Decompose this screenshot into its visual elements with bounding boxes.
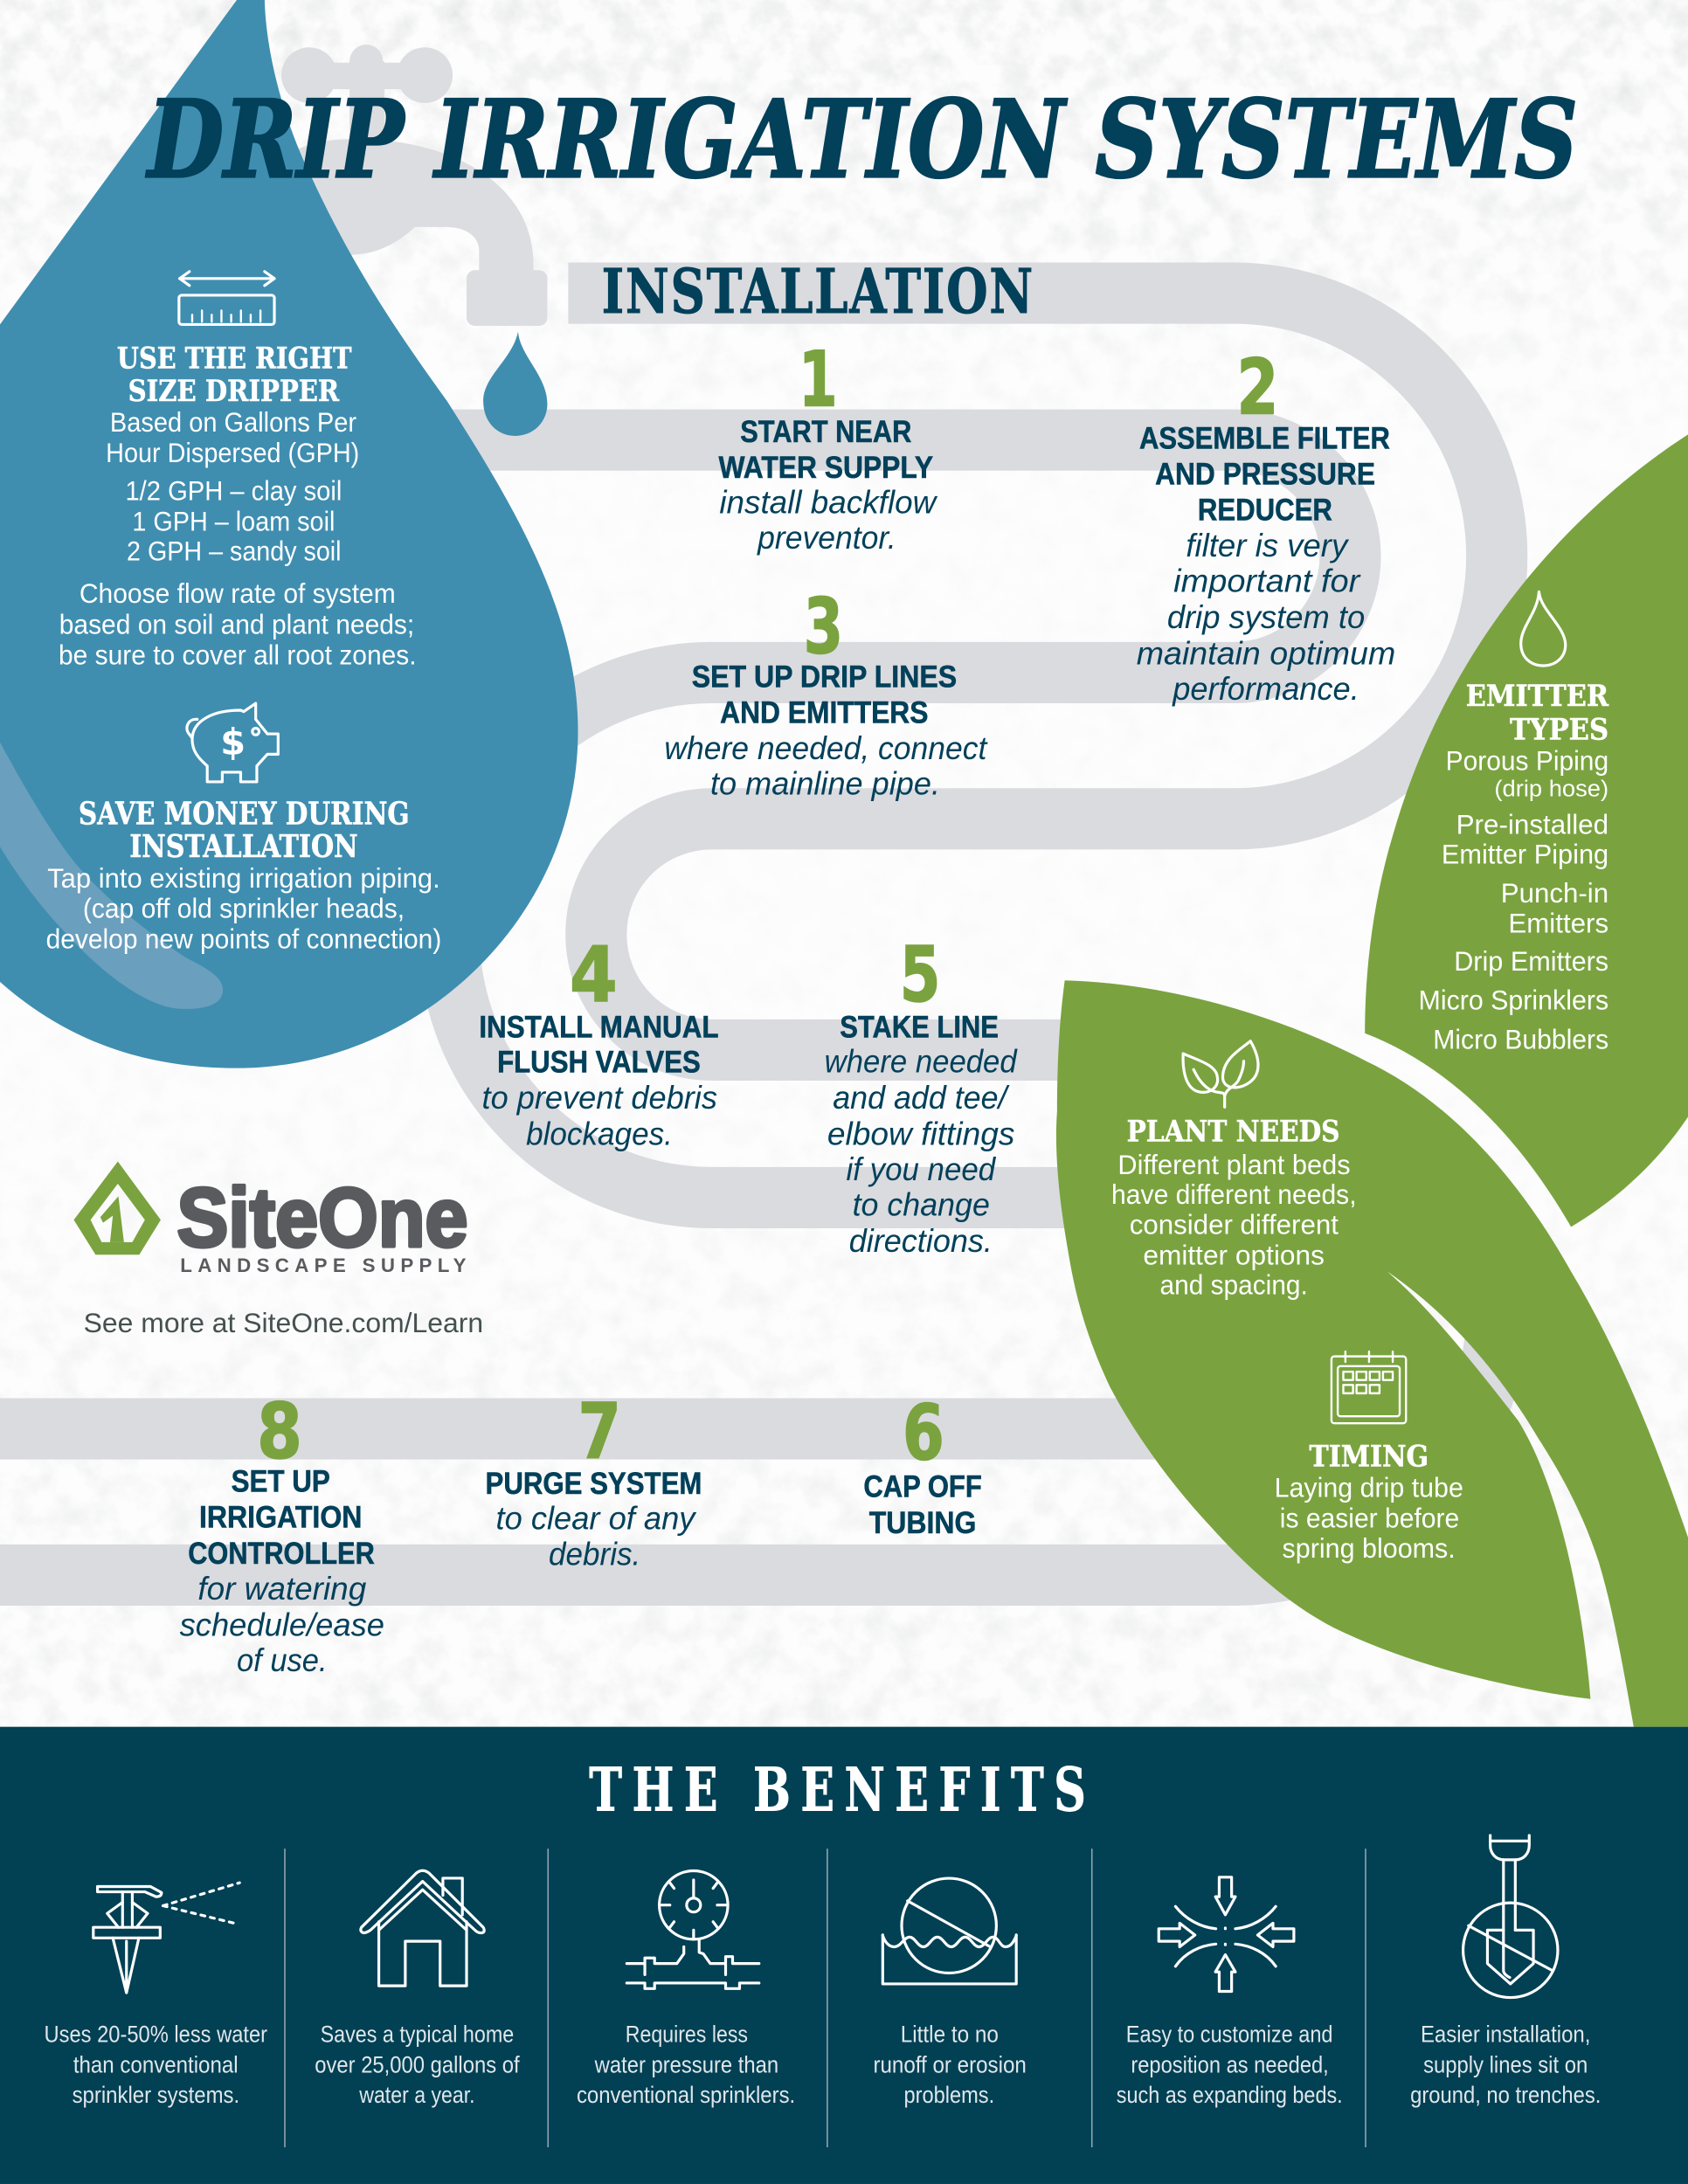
benefit text: water a year. [358,2081,475,2108]
step 8: for watering [197,1571,367,1607]
timing body text: spring blooms. [1282,1533,1456,1564]
step 5: where needed [825,1043,1018,1079]
step 3: SET UP DRIP LINES [692,660,957,694]
step 2: performance. [1172,671,1359,707]
icon: ruler with arrow [179,272,274,324]
step 1 [719,335,938,556]
benefit text: Requires less [626,2021,748,2048]
benefit 5: easy to customize [1117,1877,1343,2108]
benefit 2: saves gallons [315,1870,520,2108]
step 1: START NEAR [740,415,911,449]
panel: plant needs [1111,1041,1357,1301]
logo wordmark: SiteOne [176,1171,468,1265]
plant needs body text [1111,1150,1357,1301]
step 1: WATER SUPPLY [719,451,933,485]
step 4: 4 [570,930,618,1019]
benefit text: runoff or erosion [873,2051,1027,2078]
step 5: directions. [849,1223,993,1259]
step 8 [180,1387,384,1678]
step 8: schedule/ease [180,1607,384,1642]
savings body text: Tap into existing irrigation piping. [47,863,440,894]
step 7: debris. [549,1537,640,1572]
icon: calendar [1332,1351,1406,1423]
emitter list: Porous Piping [1446,746,1608,777]
emitter list: Drip Emitters [1454,946,1608,977]
step 2: drip system to [1167,599,1365,635]
dripper body text: 1 GPH – loam soil [132,506,335,536]
panel: the benefits [0,1727,1688,2184]
step 2: REDUCER [1198,494,1332,528]
timing body text: Laying drip tube [1275,1473,1463,1503]
dripper body text: 2 GPH – sandy soil [127,536,342,567]
step 5: STAKE LINE [840,1011,999,1045]
savings heading [79,796,410,865]
plant needs body text: Different plant beds [1117,1150,1351,1180]
dripper body text: Based on Gallons Per [110,407,356,438]
savings heading: SAVE MONEY DURING [79,796,410,832]
step 3: where needed, connect [664,730,988,766]
step 5 [825,930,1018,1259]
step 5: elbow fittings [827,1116,1014,1151]
panel: emitter types [1419,591,1609,1054]
benefits heading: THE BENEFITS [589,1755,1086,1825]
step 2: ASSEMBLE FILTER [1139,421,1390,455]
step 2: important for [1173,563,1361,598]
panel: timing [1275,1351,1463,1564]
step 6: CAP OFF [863,1470,982,1504]
icon: no runoff basin [882,1878,1016,1984]
drop highlight [0,743,223,1009]
plant needs body text: and spacing. [1160,1270,1308,1301]
icon: piggy bank [187,703,278,782]
benefit text [45,2021,267,2108]
plant needs body text: consider different [1130,1209,1339,1240]
benefit text: Easy to customize and [1126,2021,1333,2048]
step 3 [664,583,988,802]
benefit text: water pressure than [594,2051,778,2078]
savings body text: (cap off old sprinkler heads, [83,894,405,924]
heading: installation: INSTALLATION [602,255,1033,328]
icon: grey faucet [272,45,547,326]
serpentine pipe: inner line [0,440,1350,1429]
benefit text: Easier installation, [1421,2021,1590,2048]
dripper body text: Hour Dispersed (GPH) [106,438,359,468]
emitter list: Emitters [1508,908,1608,938]
dripper body text: based on soil and plant needs; [59,609,414,639]
benefit text [577,2021,795,2108]
step 6: 6 [903,1389,944,1478]
emitter list [1419,746,1608,1054]
step 1: install backflow [719,484,938,520]
step 5: 5 [900,930,940,1019]
benefit text: Little to no [901,2021,999,2048]
benefit text: supply lines sit on [1423,2051,1588,2078]
step 4: to prevent debris [482,1080,717,1116]
step 5: and add tee/ [833,1080,1010,1116]
step 1: 1 [799,335,838,425]
emitter heading: EMITTER [1466,679,1609,713]
benefit text: ground, no trenches. [1410,2081,1601,2108]
step 3: AND EMITTERS [720,695,928,729]
step 8: SET UP [232,1465,330,1499]
benefit text: reposition as needed, [1131,2051,1329,2078]
step 8: 8 [257,1387,302,1476]
plant leaf and stem [1056,980,1688,1727]
logo tagline: LANDSCAPE SUPPLY [180,1254,467,1276]
icon: converging arrows [1159,1877,1294,1992]
panel: use the right size dripper [59,272,417,670]
emitter heading [1466,679,1609,746]
large water drop panel [0,0,578,1068]
benefit text: than conventional [73,2051,239,2078]
plant needs body text: have different needs, [1111,1179,1357,1210]
step 4: INSTALL MANUAL [479,1011,719,1045]
paper background [0,0,1688,1727]
dripper heading: SIZE DRIPPER [128,374,340,408]
dripper body text: be sure to cover all root zones. [59,639,417,670]
icon: outline drop [1521,591,1566,666]
step 5: to change [853,1187,990,1223]
icon: house [361,1870,484,1986]
benefit text: sprinkler systems. [73,2081,239,2108]
savings heading: INSTALLATION [129,829,358,865]
step 8: IRRIGATION [199,1501,362,1535]
emitter heading: TYPES [1510,712,1608,746]
benefit 1: less water [45,1883,267,2108]
icon: dollar sign: $ [220,722,246,764]
timing body text [1275,1473,1463,1564]
step 6: TUBING [869,1506,976,1540]
step 1: preventor. [757,520,896,556]
panel: save money during installation [46,703,441,954]
emitter list: (drip hose) [1494,775,1608,801]
emitter list: Punch-in [1501,878,1608,909]
serpentine pipe: outer line [0,294,1497,1575]
step 2: filter is very [1186,528,1350,563]
savings body text: develop new points of connection) [46,923,441,954]
column dividers [285,1849,1366,2147]
savings body text [46,863,441,954]
step 2 [1137,342,1395,707]
step 6 [863,1389,982,1540]
step 5: if you need [847,1151,997,1187]
logo: SiteOne [73,1161,468,1276]
benefit text: conventional sprinklers. [577,2081,795,2108]
dripper body text: Choose flow rate of system [80,578,396,609]
icon: sprinkler [93,1883,239,1993]
step 2: maintain optimum [1137,635,1395,671]
benefit text: such as expanding beds. [1117,2081,1343,2108]
benefit text [1117,2021,1343,2108]
benefit 6: easier installation [1410,1835,1601,2108]
emitter list: Emitter Piping [1442,839,1608,869]
emitter list: Micro Sprinklers [1419,985,1608,1016]
benefit text: Uses 20-50% less water [45,2021,267,2048]
plant needs body text: emitter options [1143,1240,1325,1270]
icon: pressure gauge [626,1870,759,1988]
icon: seedling [1183,1041,1258,1107]
emitter leaf [1365,434,1688,1227]
benefit text [873,2021,1027,2108]
step 2: 2 [1237,342,1278,432]
benefit text: Saves a typical home [321,2021,514,2048]
step 8: of use. [237,1642,328,1678]
icon: no shovel [1463,1835,1558,1998]
timing body text: is easier before [1280,1503,1459,1534]
dripper heading: USE THE RIGHT [117,342,352,376]
step 2: AND PRESSURE [1155,457,1375,491]
benefit text: problems. [904,2081,994,2108]
step 4 [479,930,719,1151]
step 7 [486,1386,702,1572]
emitter list: Pre-installed [1456,809,1608,840]
timing heading: TIMING [1309,1440,1429,1474]
dripper heading [117,342,352,408]
website link text: See more at SiteOne.com/Learn [84,1307,483,1338]
step 7: to clear of any [495,1500,697,1536]
step 8: CONTROLLER [188,1537,375,1571]
emitter list: Micro Bubblers [1433,1024,1608,1054]
benefit 4: little runoff [873,1878,1027,2108]
step 4: FLUSH VALVES [497,1045,701,1079]
step 7: 7 [578,1386,621,1476]
benefit text [1410,2021,1601,2108]
step 3: to mainline pipe. [710,766,940,802]
benefit 3: less pressure [577,1870,795,2108]
benefit text [315,2021,520,2108]
plant needs heading: PLANT NEEDS [1127,1115,1339,1149]
benefit text: over 25,000 gallons of [315,2051,520,2078]
icon: logo mark [73,1161,161,1254]
step 7: PURGE SYSTEM [486,1467,702,1501]
dripper body text: 1/2 GPH – clay soil [125,475,342,506]
icon: small falling drop [483,331,547,436]
step 3: 3 [804,583,843,672]
dripper body text [59,407,417,670]
step 4: blockages. [526,1116,673,1151]
